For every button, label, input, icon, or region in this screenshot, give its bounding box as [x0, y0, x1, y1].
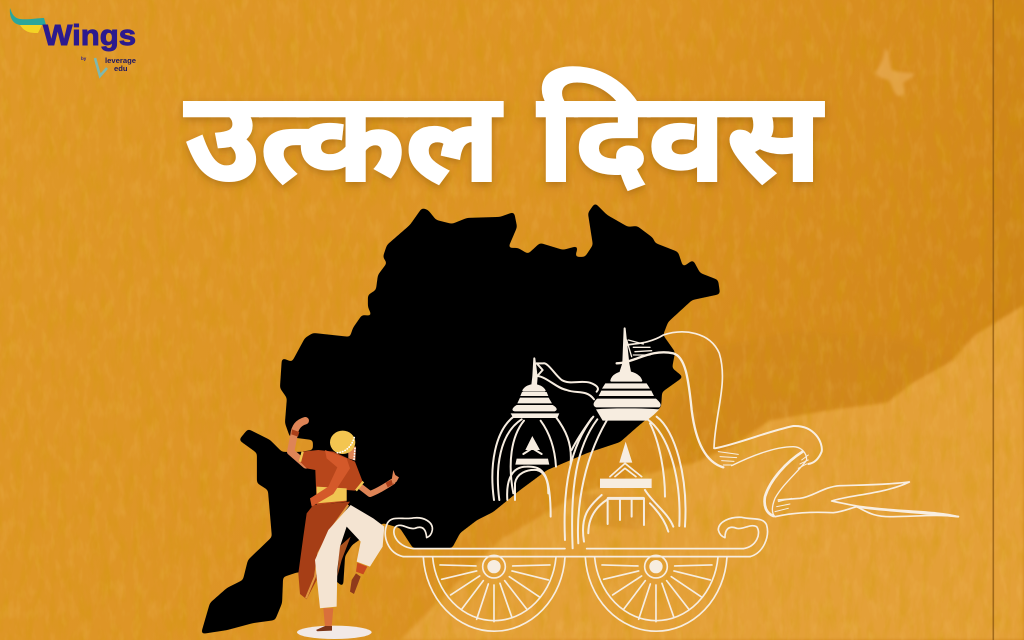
logo partner suffix: edu [114, 64, 128, 73]
dancer blouse [300, 450, 363, 505]
dancer [291, 421, 399, 639]
wheel: left [423, 555, 565, 631]
dancer ankle cuff [356, 563, 367, 574]
dancer standing calf [323, 608, 333, 627]
dancer dhoti trim [306, 505, 348, 598]
wheel: right [585, 555, 727, 631]
logo wordmark: Wings [43, 20, 136, 52]
dancer shoe [316, 626, 332, 631]
dancer trousers [315, 505, 384, 608]
dancer lifted foot [350, 573, 361, 594]
dancer head [348, 447, 356, 461]
dancer shoulder scarf [310, 450, 350, 507]
logo check icon [95, 58, 107, 76]
dancer raised arm [291, 421, 306, 465]
logo swoosh [10, 8, 46, 33]
dancer sleeve trims [300, 452, 363, 491]
dancer lower dhoti [298, 502, 350, 599]
dancer outstretched arm [358, 482, 393, 494]
logo byline: by [81, 56, 87, 61]
left temple dome [492, 358, 598, 517]
dancer hand [392, 470, 399, 484]
dancer floor shadow [297, 626, 372, 639]
dancer turban [330, 431, 355, 454]
logo partner name: leverage [105, 56, 136, 65]
map of Odisha [201, 203, 720, 634]
dancer pearl trim [337, 437, 355, 460]
dancer wrist band [291, 429, 299, 437]
dancer waist sash [317, 487, 347, 503]
chariot base with scrolled ends [385, 517, 767, 557]
dancer wrist cuff [386, 479, 394, 487]
title: उत्कल दिवस [184, 66, 824, 208]
logo: Wings by Leverage Edu [10, 8, 136, 76]
flowing ribbon [617, 332, 958, 517]
right temple dome [565, 328, 685, 548]
chariot with temple domes [385, 328, 767, 631]
dancer inner fold [337, 537, 351, 577]
